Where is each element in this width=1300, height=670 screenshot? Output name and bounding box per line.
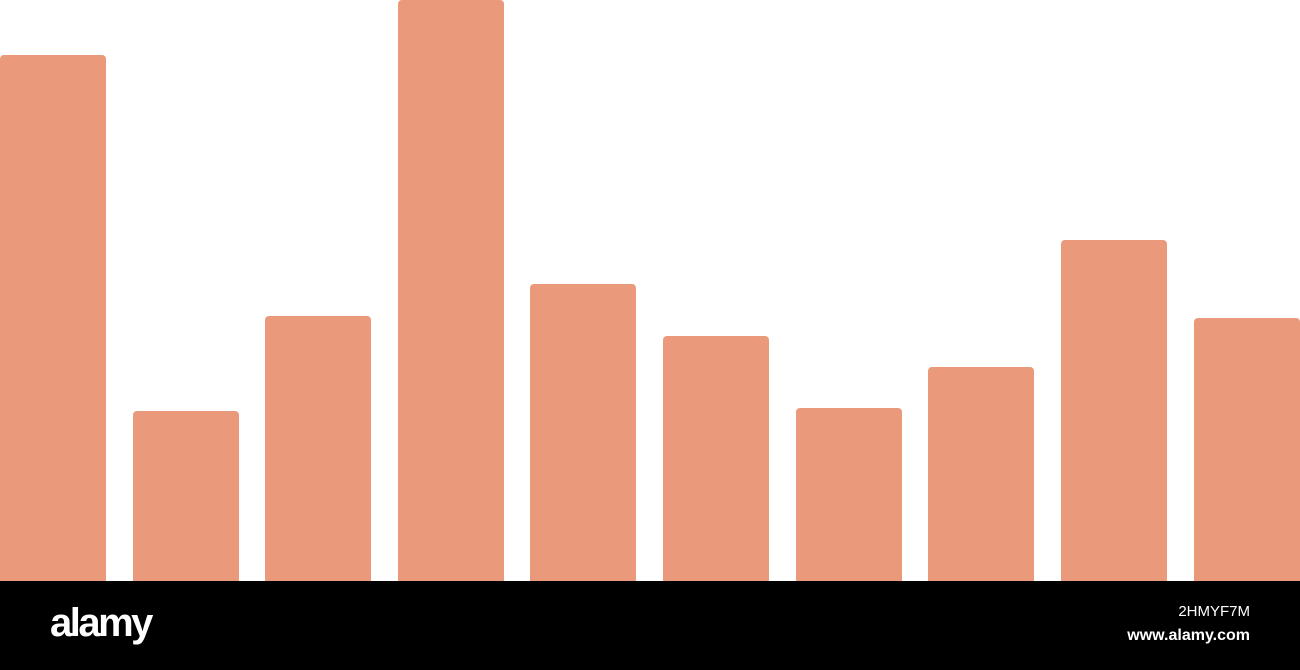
bar 7 xyxy=(796,408,902,581)
bar 1 xyxy=(0,55,106,581)
image id: 2HMYF7M xyxy=(1178,603,1250,620)
website url: www.alamy.com xyxy=(1127,627,1250,644)
bar 9 xyxy=(1061,240,1167,581)
bar 3 xyxy=(265,316,371,581)
bar 4 xyxy=(398,0,504,581)
footer band xyxy=(0,581,1300,670)
bar 5 xyxy=(530,284,636,581)
bar 2 xyxy=(133,411,239,581)
bar 8 xyxy=(928,367,1034,581)
logo text: alamy xyxy=(50,601,151,645)
bar 10 xyxy=(1194,318,1300,581)
bar 6 xyxy=(663,336,769,581)
